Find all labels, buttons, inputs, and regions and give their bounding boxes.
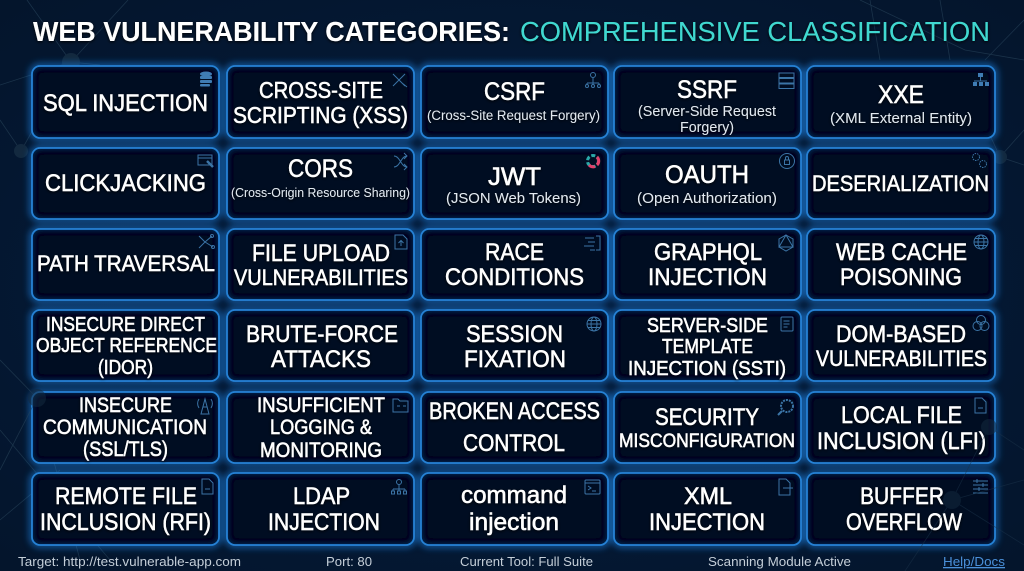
label: LOCAL FILE (841, 402, 962, 429)
title: COMPREHENSIVE CLASSIFICATION (520, 16, 990, 47)
label: XML (684, 483, 732, 510)
label (246, 321, 398, 373)
icon: directory tree (392, 480, 406, 494)
label (461, 482, 567, 536)
icon: browser cursor (198, 155, 213, 167)
label: CONDITIONS (445, 264, 584, 291)
label: VULNERABILITIES (816, 346, 987, 371)
label: (SSL/TLS) (83, 438, 168, 461)
label: MONITORING (260, 439, 382, 462)
card: Insufficient Logging (227, 392, 414, 463)
card: LDAP Injection (227, 473, 414, 545)
icon: file upload (395, 235, 407, 249)
label: XXE (878, 81, 924, 109)
label: OBJECT REFERENCE (36, 335, 217, 357)
label (638, 76, 777, 136)
label: SCRIPTING (XSS) (233, 102, 408, 128)
label: JWT (488, 163, 541, 191)
icon: graphql hexagon (779, 235, 793, 251)
card: DOM-Based Vulnerabilities (807, 310, 995, 381)
icon: crossed arrows (393, 74, 407, 87)
label: CSRF (484, 78, 545, 106)
label: PATH TRAVERSAL (37, 251, 215, 276)
label (619, 404, 795, 452)
card: CORS (227, 148, 414, 219)
label (429, 398, 600, 457)
label: TEMPLATE (662, 336, 753, 358)
card: GraphQL Injection (614, 229, 801, 300)
label: CONTROL (463, 430, 565, 457)
label: (Cross-Origin Resource Sharing) (231, 185, 410, 200)
card: File Upload Vulnerabilities (227, 229, 414, 300)
card: XML Injection (614, 473, 801, 545)
label: Forgery) (680, 119, 734, 136)
label: RACE (485, 239, 544, 266)
card: Command Injection (421, 473, 608, 545)
icon: network (973, 73, 989, 86)
label: INJECTION (649, 509, 765, 536)
card: Brute-Force Attacks (227, 310, 414, 381)
label (648, 239, 767, 291)
label: OAUTH (665, 161, 749, 189)
icon: gear search (778, 400, 793, 415)
icon: lock seal (780, 154, 794, 168)
label: CROSS-SITE (259, 77, 383, 103)
card: Broken Access Control (421, 392, 608, 463)
label: FIXATION (464, 346, 566, 373)
label: (XML External Entity) (830, 110, 972, 127)
label (817, 402, 986, 455)
label (268, 483, 380, 536)
label: SECURITY (655, 404, 759, 431)
icon: XML file (779, 479, 793, 495)
label: (Server-Side Request (638, 103, 777, 120)
icon: gears (972, 154, 986, 168)
label: (Open Authorization) (637, 190, 777, 207)
label: command (461, 482, 567, 509)
label (628, 315, 786, 380)
label: WEB CACHE (836, 239, 967, 266)
icon: globe (974, 235, 988, 249)
icon: RFI file (202, 479, 213, 494)
label (233, 77, 408, 128)
icon: antenna (198, 399, 212, 414)
label: INSUFFICIENT (257, 394, 385, 417)
card: Race Conditions (421, 229, 608, 300)
icon: hierarchy (586, 72, 600, 88)
label: SSRF (677, 76, 737, 104)
label: INCLUSION (RFI) (40, 509, 211, 536)
label (836, 239, 967, 291)
label: VULNERABILITIES (234, 265, 408, 290)
status bar: Target: http://test.vulnerable-app.com (18, 554, 241, 569)
status bar: Port: 80 (326, 554, 372, 569)
card: Path Traversal (32, 229, 219, 300)
label: (JSON Web Tokens) (446, 190, 581, 207)
icon: database (200, 72, 212, 86)
title (33, 16, 990, 47)
label (637, 161, 777, 207)
label (36, 314, 217, 379)
card: IDOR (32, 310, 219, 381)
label: (Cross-Site Request Forgery) (427, 108, 600, 123)
label: BUFFER (860, 483, 944, 510)
card: SSTI (614, 310, 801, 381)
label: OVERFLOW (846, 509, 962, 536)
icon: overlapping circles (973, 316, 989, 330)
label (427, 78, 600, 123)
label (816, 321, 987, 371)
label: CORS (288, 155, 353, 183)
card: SSRF (614, 66, 801, 138)
icon: overflow lines (973, 479, 988, 493)
label (234, 240, 408, 290)
card: OAuth (614, 148, 801, 219)
label (43, 394, 207, 461)
card: Insecure Communication (32, 392, 219, 463)
card: Local File Inclusion (807, 392, 995, 463)
icon: JWT wheel (588, 156, 599, 167)
card: XXE (807, 66, 995, 138)
label (649, 483, 765, 536)
label: DOM-BASED (836, 321, 966, 348)
label: INJECTION (SSTI) (628, 358, 786, 380)
card: Security Misconfiguration (614, 392, 801, 463)
label: LOGGING & (270, 416, 372, 439)
label: injection (469, 509, 559, 536)
label (464, 321, 566, 373)
icon: speed lines (584, 236, 600, 250)
label: INJECTION (648, 264, 767, 291)
label: INCLUSION (LFI) (817, 428, 986, 455)
label: SESSION (466, 321, 563, 348)
status bar: Current Tool: Full Suite (460, 554, 593, 569)
label: BRUTE-FORCE (246, 321, 398, 348)
icon: shuffle (394, 153, 407, 170)
label (446, 163, 581, 207)
label: SERVER-SIDE (647, 315, 768, 337)
label: DESERIALIZATION (812, 171, 989, 196)
icon: document (781, 317, 793, 331)
label: FILE UPLOAD (252, 240, 390, 267)
label: CLICKJACKING (45, 170, 206, 197)
label (40, 483, 211, 536)
label: REMOTE FILE (55, 483, 197, 510)
card: Session Fixation (421, 310, 608, 381)
icon: terminal (585, 480, 600, 494)
icon: server (779, 73, 794, 88)
card: Web Cache Poisoning (807, 229, 995, 300)
card: Deserialization (807, 148, 995, 219)
label (846, 483, 962, 536)
label (231, 155, 410, 200)
label (257, 394, 385, 462)
label: GRAPHQL (654, 239, 762, 266)
card: SQL Injection (32, 66, 219, 138)
icon: LFI file (975, 398, 986, 413)
label: INJECTION (268, 509, 380, 536)
icon: path nodes (199, 234, 214, 248)
icon: globe (587, 317, 601, 331)
label (445, 239, 584, 291)
label: MISCONFIGURATION (619, 431, 795, 452)
icon: folder (393, 399, 408, 412)
status bar: Scanning Module Active (708, 554, 851, 569)
label: (IDOR) (98, 357, 153, 379)
label: SQL INJECTION (43, 90, 208, 117)
label: INSECURE (79, 394, 172, 417)
card: CSRF (421, 66, 608, 138)
card: Cross-Site Scripting (227, 66, 414, 138)
label: POISONING (840, 264, 962, 291)
label: COMMUNICATION (43, 416, 207, 439)
title: WEB VULNERABILITY CATEGORIES: (33, 16, 510, 47)
card: Clickjacking (32, 148, 219, 219)
label: ATTACKS (271, 346, 371, 373)
status bar: Help/Docs (943, 554, 1006, 569)
label: BROKEN ACCESS (429, 398, 600, 425)
label: LDAP (293, 483, 350, 510)
label (830, 81, 972, 127)
card: JWT (421, 148, 608, 219)
card: Buffer Overflow (807, 473, 995, 545)
status bar (18, 554, 1006, 569)
card: Remote File Inclusion (32, 473, 219, 545)
label: INSECURE DIRECT (46, 314, 205, 336)
